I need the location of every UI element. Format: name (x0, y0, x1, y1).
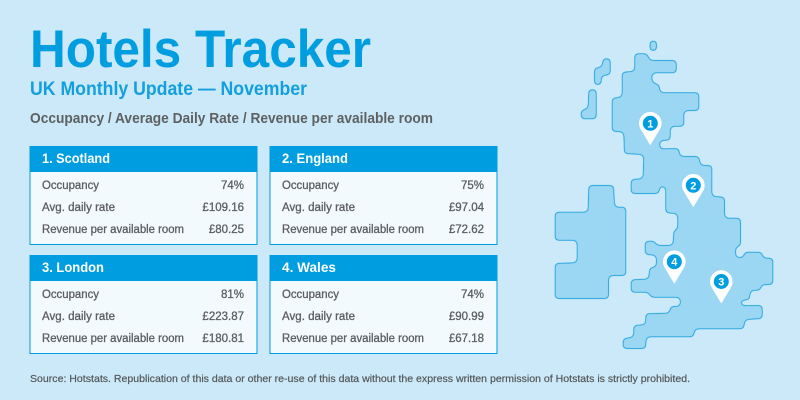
pin 4: Wales: 4 (671, 257, 678, 269)
panel: Scotland: Revenue per available room (42, 224, 184, 236)
panel: London: Revenue per available room (42, 333, 184, 345)
panel: Scotland: 1. Scotland (42, 150, 110, 166)
panel: London: 81% (221, 289, 244, 301)
panel: England: £72.62 (449, 224, 484, 236)
panel: London: 3. London (42, 259, 104, 275)
panel: Scotland: Occupancy (42, 180, 99, 192)
pin 2: England (682, 174, 705, 207)
panel: Wales: £90.99 (449, 311, 484, 323)
map of UK and Ireland (555, 40, 773, 349)
panel: London: £223.87 (202, 311, 244, 323)
panel: Scotland: Avg. daily rate (42, 202, 115, 214)
panel: Wales: £67.18 (449, 333, 484, 345)
panel: Wales: Avg. daily rate (282, 311, 355, 323)
panel: England: £97.04 (449, 202, 485, 214)
panel: Scotland: £80.25 (209, 224, 244, 236)
pin 1: Scotland (639, 112, 662, 145)
panel: England: Avg. daily rate (282, 202, 355, 214)
panel: Wales (270, 255, 497, 354)
panel: Wales: Revenue per available room (282, 333, 424, 345)
panel: Scotland: 74% (221, 180, 244, 192)
panel: England (270, 146, 497, 244)
pin 3: London (710, 270, 733, 304)
subtitle: UK Monthly Update — November (30, 79, 308, 100)
panel: Wales: 4. Wales (282, 259, 336, 275)
panel: England: 2. England (282, 150, 348, 166)
pin 1: Scotland: 1 (647, 118, 653, 130)
panel: England: 75% (461, 180, 484, 192)
panel: London: £180.81 (202, 333, 244, 345)
panel: England: Occupancy (282, 180, 339, 192)
panel: England: Revenue per available room (282, 224, 424, 236)
panel: Scotland: £109.16 (202, 202, 244, 214)
title: Hotels Tracker (30, 20, 371, 79)
pin 3: London: 3 (718, 276, 724, 288)
source note: Source: Hotstats. Republication of this data or other re-use of this data without the express written permission of Hotstats is strictly prohibited. (30, 373, 690, 385)
panel: Wales: 74% (461, 289, 484, 301)
panel: London (30, 255, 257, 354)
panel: Scotland (30, 146, 257, 244)
pin 4: Wales (663, 250, 686, 284)
pin 2: England: 2 (690, 180, 696, 192)
panel: London: Occupancy (42, 289, 99, 301)
panel: Wales: Occupancy (282, 289, 339, 301)
panel: London: Avg. daily rate (42, 311, 115, 323)
metrics line: Occupancy / Average Daily Rate / Revenue per available room (30, 110, 433, 127)
